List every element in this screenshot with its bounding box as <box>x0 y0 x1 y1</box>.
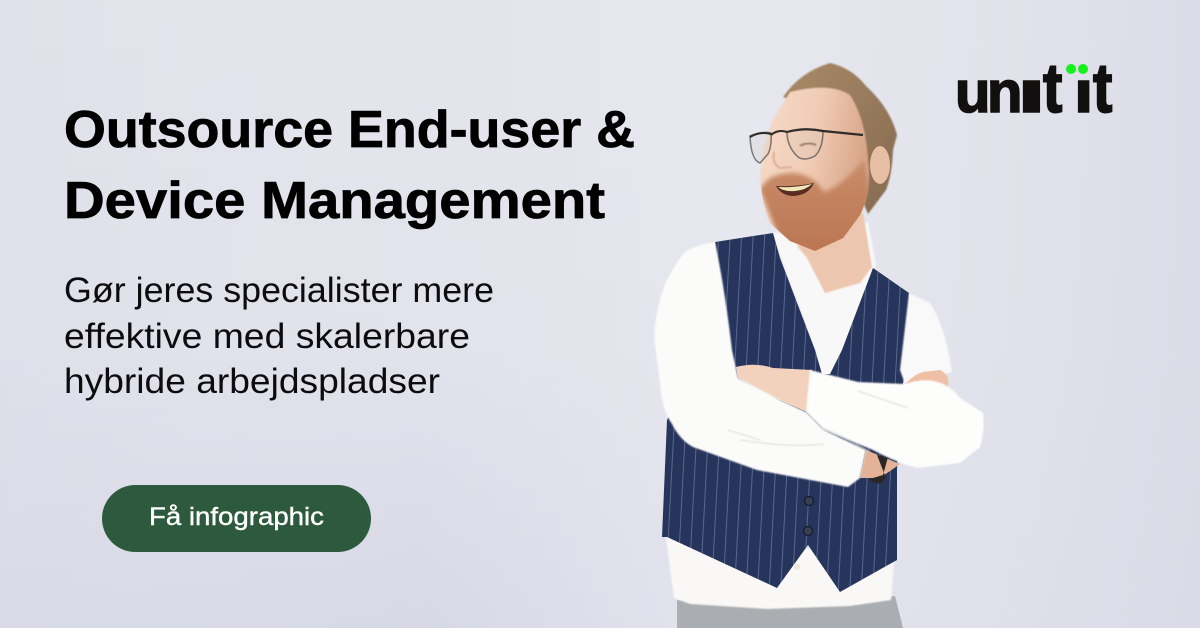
logo: unit it: n <box>987 60 1022 125</box>
logo: unit it: u <box>955 60 990 125</box>
lower shirt <box>665 530 894 609</box>
trousers <box>677 596 903 628</box>
title <box>64 101 635 230</box>
subtitle: effektive med skalerbare <box>64 317 470 356</box>
logo: unit it: i <box>1017 60 1046 124</box>
person: smiling man in pinstripe vest with crossed arms <box>655 63 984 628</box>
glasses <box>750 129 863 163</box>
hand on right arm <box>905 370 948 390</box>
button: Få infographic <box>102 485 371 552</box>
hair back <box>783 63 897 214</box>
subtitle: Gør jeres specialister mere <box>64 271 494 310</box>
logo: unit it: i <box>1074 59 1093 125</box>
right forearm sleeve <box>806 370 984 468</box>
nose shadow <box>774 152 792 168</box>
vest buttons <box>804 496 814 536</box>
subtitle <box>64 271 494 401</box>
left forearm skin <box>736 365 812 412</box>
logo: unit it: t <box>1093 49 1112 127</box>
title: Outsource End-user & <box>64 101 635 159</box>
left sleeve <box>655 242 866 487</box>
beard <box>761 162 868 251</box>
left hand wrist and watch <box>860 450 900 478</box>
title: Device Management <box>64 172 605 230</box>
shirt chest <box>772 222 876 376</box>
face <box>760 88 869 251</box>
shirt button <box>794 564 800 570</box>
logo: unit it <box>958 64 1112 114</box>
green dots <box>1066 64 1088 74</box>
button: Få infographic: Få infographic <box>149 503 324 531</box>
eye <box>800 143 816 146</box>
sleeve creases <box>728 391 908 452</box>
neck <box>797 213 872 293</box>
logo: unit it: t <box>1043 49 1062 127</box>
subtitle: hybride arbejdspladser <box>64 362 440 401</box>
ear <box>870 146 890 184</box>
right upper sleeve <box>900 293 952 384</box>
mouth <box>776 183 814 196</box>
vest <box>662 233 909 592</box>
